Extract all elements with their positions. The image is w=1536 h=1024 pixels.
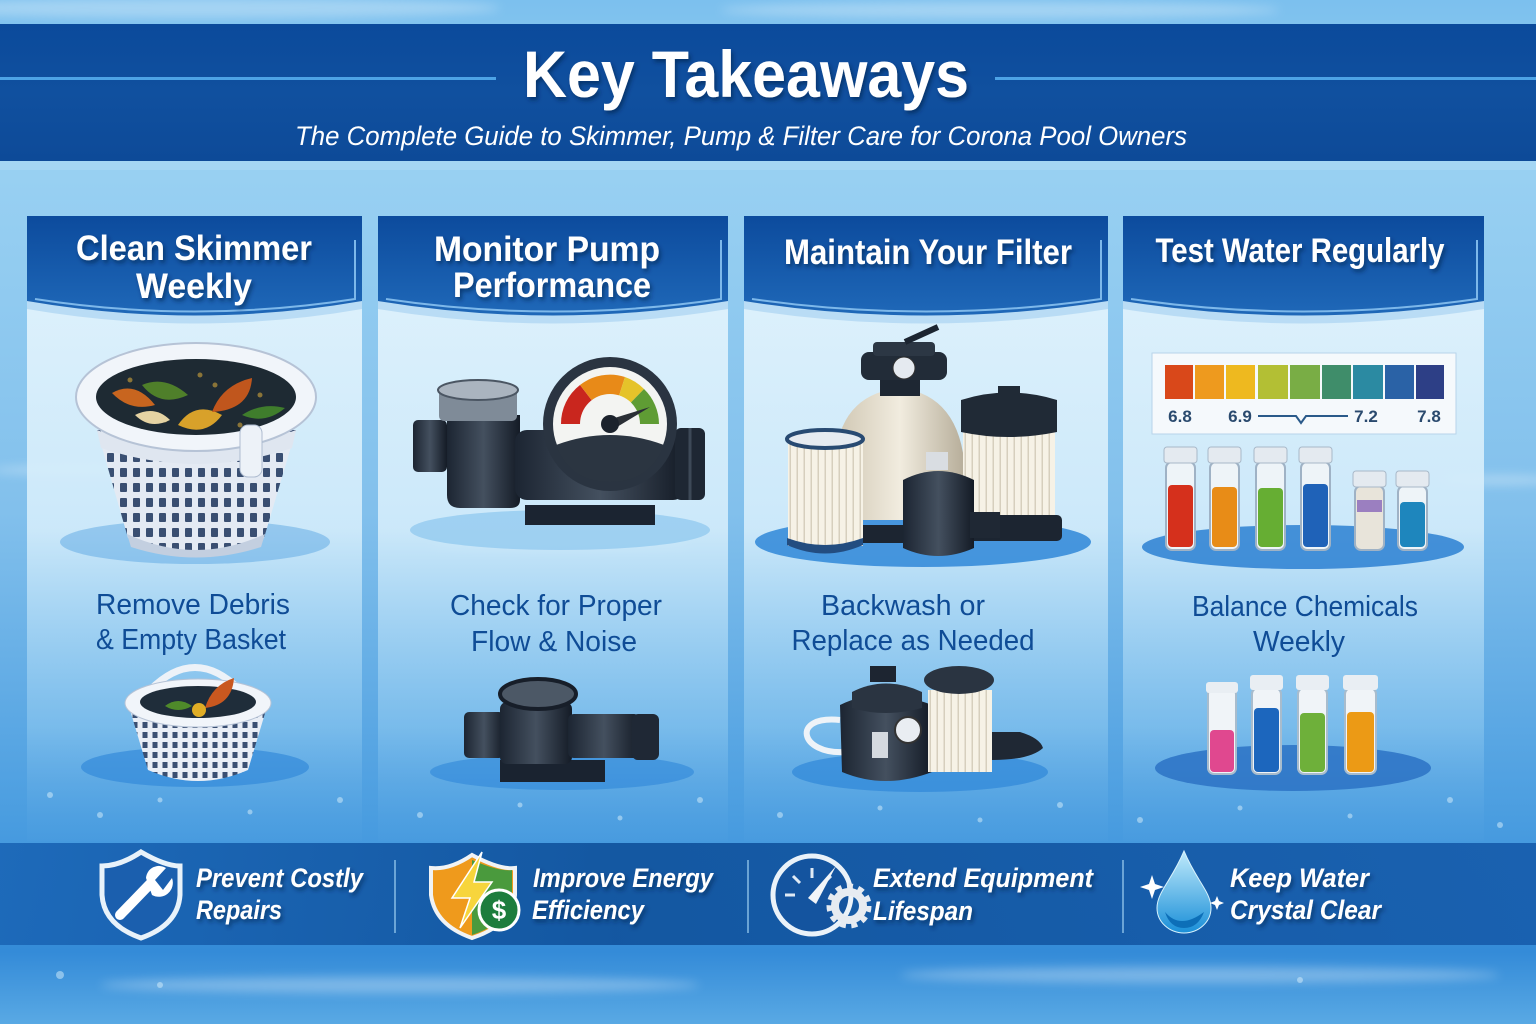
icon: gauge and gear [773,856,869,934]
caption [1192,591,1418,658]
benefit text: Crystal Clear [1230,895,1382,925]
caption: & Empty Basket [96,624,286,656]
panel: test water [1123,216,1484,841]
icon: small test tubes [1155,675,1431,791]
heading text: Test Water Regularly [1156,232,1445,270]
benefit text: Repairs [196,895,282,925]
panel heading banner [27,216,362,324]
heading text: Performance [453,266,651,305]
benefit text: Lifespan [873,896,973,926]
benefit text: Efficiency [532,895,646,925]
caption: Flow & Noise [471,626,637,658]
panel: monitor pump [378,216,728,841]
subtitle: The Complete Guide to Skimmer, Pump & Filter Care for Corona Pool Owners [295,121,1187,151]
caption [792,590,1034,657]
heading text [434,230,660,305]
speckled water highlights [47,792,1503,988]
chart: pH colour scale [1152,353,1456,434]
benefit: energy efficiency [431,852,715,938]
benefit text: Extend Equipment [873,863,1094,893]
caption: Check for Proper [450,590,662,622]
benefit text [873,863,1094,926]
icon: energy shield: $ [492,895,507,925]
panel heading banner [744,216,1108,324]
icon: small pump [430,679,694,790]
caption: Balance Chemicals [1192,591,1418,623]
panel heading banner [378,216,728,324]
icon: small basket [81,668,309,787]
icon: small filter set [792,666,1048,792]
icon: water drop with sparkles [1140,851,1224,933]
caption [450,590,662,658]
panel heading banner [1123,216,1484,324]
chart: pH colour scale: 7.2 [1354,407,1378,426]
heading text: Weekly [136,267,253,306]
chart: pH colour scale: 6.9 [1228,407,1252,426]
header band [0,24,1536,170]
benefit text: Keep Water [1230,863,1370,893]
heading text [76,229,312,306]
panel: clean skimmer [27,216,362,841]
title: Key Takeaways [523,37,969,111]
heading text: Monitor Pump [434,230,660,269]
benefits band [0,843,1536,945]
icon: pump with gauge [410,357,710,550]
header rule: left [0,77,496,80]
caption: Weekly [1253,626,1345,658]
benefit text [196,863,365,925]
benefit: crystal clear [1140,851,1382,933]
caption [96,589,290,656]
benefit: equipment lifespan [773,856,1094,934]
icon: energy shield [431,852,519,938]
icon: filter set [755,327,1091,567]
heading text: Clean Skimmer [76,229,312,268]
benefit text [532,863,715,925]
benefit: prevent repairs [102,852,365,938]
benefit text: Prevent Costly [196,863,365,893]
caption: Replace as Needed [792,625,1034,657]
chart: pH colour scale: 7.8 [1417,407,1441,426]
header rule: right [995,77,1536,80]
heading text: Maintain Your Filter [784,233,1072,272]
chart: pH colour scale: 6.8 [1168,407,1192,426]
panel: maintain filter [744,216,1108,841]
benefit text [1230,863,1382,925]
icon: test tubes [1142,447,1464,569]
caption: Backwash or [821,590,985,622]
caption: Remove Debris [96,589,290,621]
benefit text: Improve Energy [533,863,715,893]
icon: shield with wrench [102,852,180,938]
icon: skimmer basket with leaves [60,343,330,564]
